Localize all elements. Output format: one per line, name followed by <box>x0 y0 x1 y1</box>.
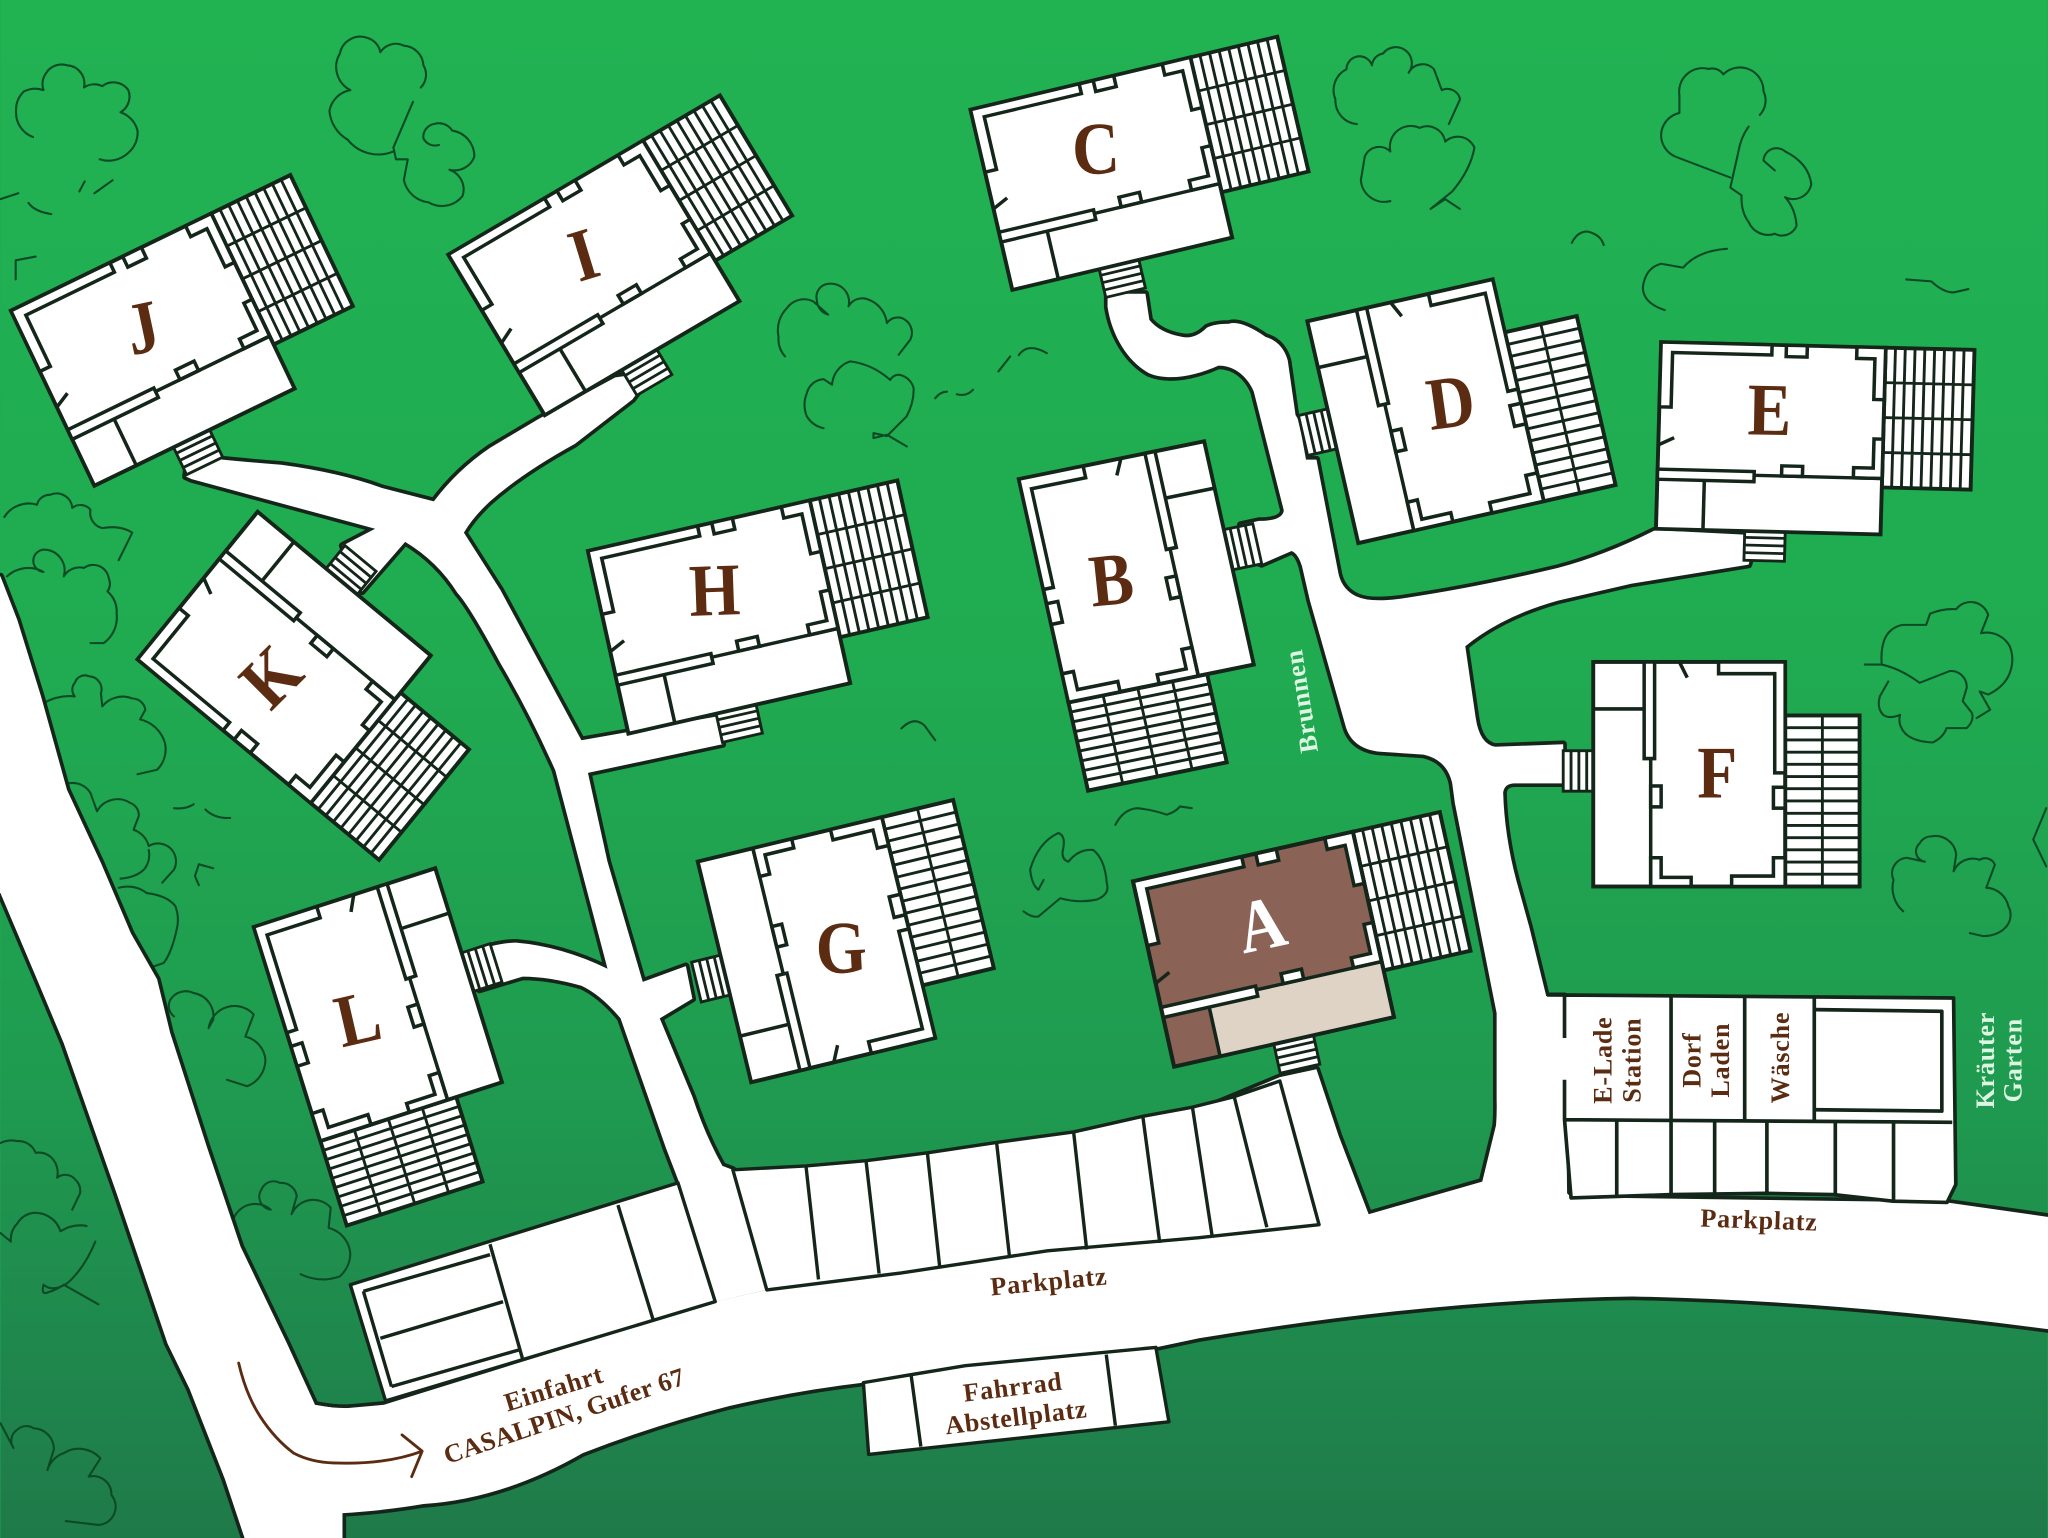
parking row center <box>733 1081 1319 1290</box>
letter E: E <box>1747 370 1792 452</box>
building I <box>448 95 832 440</box>
building E <box>1655 342 1974 566</box>
building K <box>137 489 518 860</box>
building J <box>11 175 387 513</box>
tree far left bottom <box>0 1423 116 1525</box>
building B <box>1019 435 1302 791</box>
center tree two <box>805 361 914 447</box>
tree left fourth <box>68 783 176 883</box>
tree left upper <box>4 493 132 560</box>
tree pair near J <box>329 37 474 206</box>
label: Einfahrt CASALPIN: CASALPIN, Gufer 67 <box>440 1362 689 1470</box>
label: Dorf Laden <box>1677 1023 1735 1098</box>
label: Fahrrad Abstellplatz: Fahrrad <box>962 1367 1064 1408</box>
building L <box>254 859 557 1226</box>
label: Kräuter Garten: Garten <box>1998 1018 2027 1102</box>
label: Kräuter Garten <box>1971 1012 2027 1109</box>
tree left fifth <box>119 887 178 967</box>
building H <box>588 480 944 762</box>
label: Fahrrad Abstellplatz <box>943 1367 1089 1440</box>
tree beside A <box>1023 833 1107 917</box>
small mark below H <box>901 721 935 740</box>
label: Kräuter Garten: Kräuter <box>1971 1012 2000 1109</box>
tree right of F <box>1865 602 2012 742</box>
label: Dorf Laden: Laden <box>1706 1023 1735 1098</box>
tree left third <box>43 675 166 774</box>
label: Parkplatz right: Parkplatz <box>1700 1204 1818 1237</box>
tree lower right <box>1892 836 2011 936</box>
building C <box>970 37 1326 318</box>
tree top right one <box>1661 67 1766 178</box>
letter L: L <box>328 975 389 1064</box>
label: Wäsche: Wäsche <box>1766 1012 1795 1103</box>
wave mark <box>1115 806 1192 825</box>
arrow: entrance <box>239 1363 422 1477</box>
small marks <box>174 804 230 885</box>
building A highlighted <box>1133 812 1487 1096</box>
tree top center two <box>1361 126 1474 209</box>
tree far left one <box>0 1140 80 1210</box>
letter H: H <box>688 549 741 633</box>
letter I: I <box>560 213 608 298</box>
tree near L <box>169 991 265 1086</box>
letter G: G <box>814 907 869 991</box>
label: E-Lade Station <box>1589 1016 1646 1104</box>
label: E-Lade Station: E-Lade <box>1589 1016 1618 1104</box>
tree right edge <box>2033 808 2046 866</box>
label: Dorf Laden: Dorf <box>1677 1032 1706 1088</box>
building D <box>1278 263 1616 550</box>
top right marks <box>1572 232 1968 310</box>
label: Parkplatz center: Parkplatz <box>989 1261 1109 1301</box>
service block: e-charging, shop, laundry, parking <box>1547 995 1956 1202</box>
label: Einfahrt CASALPIN: Einfahrt <box>501 1360 607 1417</box>
building G <box>669 800 1007 1089</box>
tree top right two <box>1730 127 1811 236</box>
tree far left two <box>0 1213 98 1304</box>
parking block left <box>350 1183 715 1401</box>
letter J: J <box>118 285 167 372</box>
tree top left marks <box>0 180 113 279</box>
tree top left <box>16 64 138 161</box>
label: E-Lade Station: Station <box>1617 1018 1646 1103</box>
letter B: B <box>1085 538 1137 624</box>
bicycle parking <box>863 1347 1169 1454</box>
tree top center one <box>1334 47 1460 124</box>
tree left second <box>7 550 117 643</box>
center tree one <box>778 284 912 356</box>
center marks <box>935 348 1047 398</box>
label: Fahrrad Abstellplatz: Abstellplatz <box>943 1394 1089 1440</box>
letter C: C <box>1070 108 1122 192</box>
label: Brunnen: Brunnen <box>1279 647 1324 755</box>
letter A: A <box>1230 880 1294 970</box>
building F <box>1563 662 1860 887</box>
letter K: K <box>225 630 319 724</box>
letter F: F <box>1697 733 1737 815</box>
letter D: D <box>1422 359 1480 447</box>
tree near parking <box>234 1181 350 1279</box>
